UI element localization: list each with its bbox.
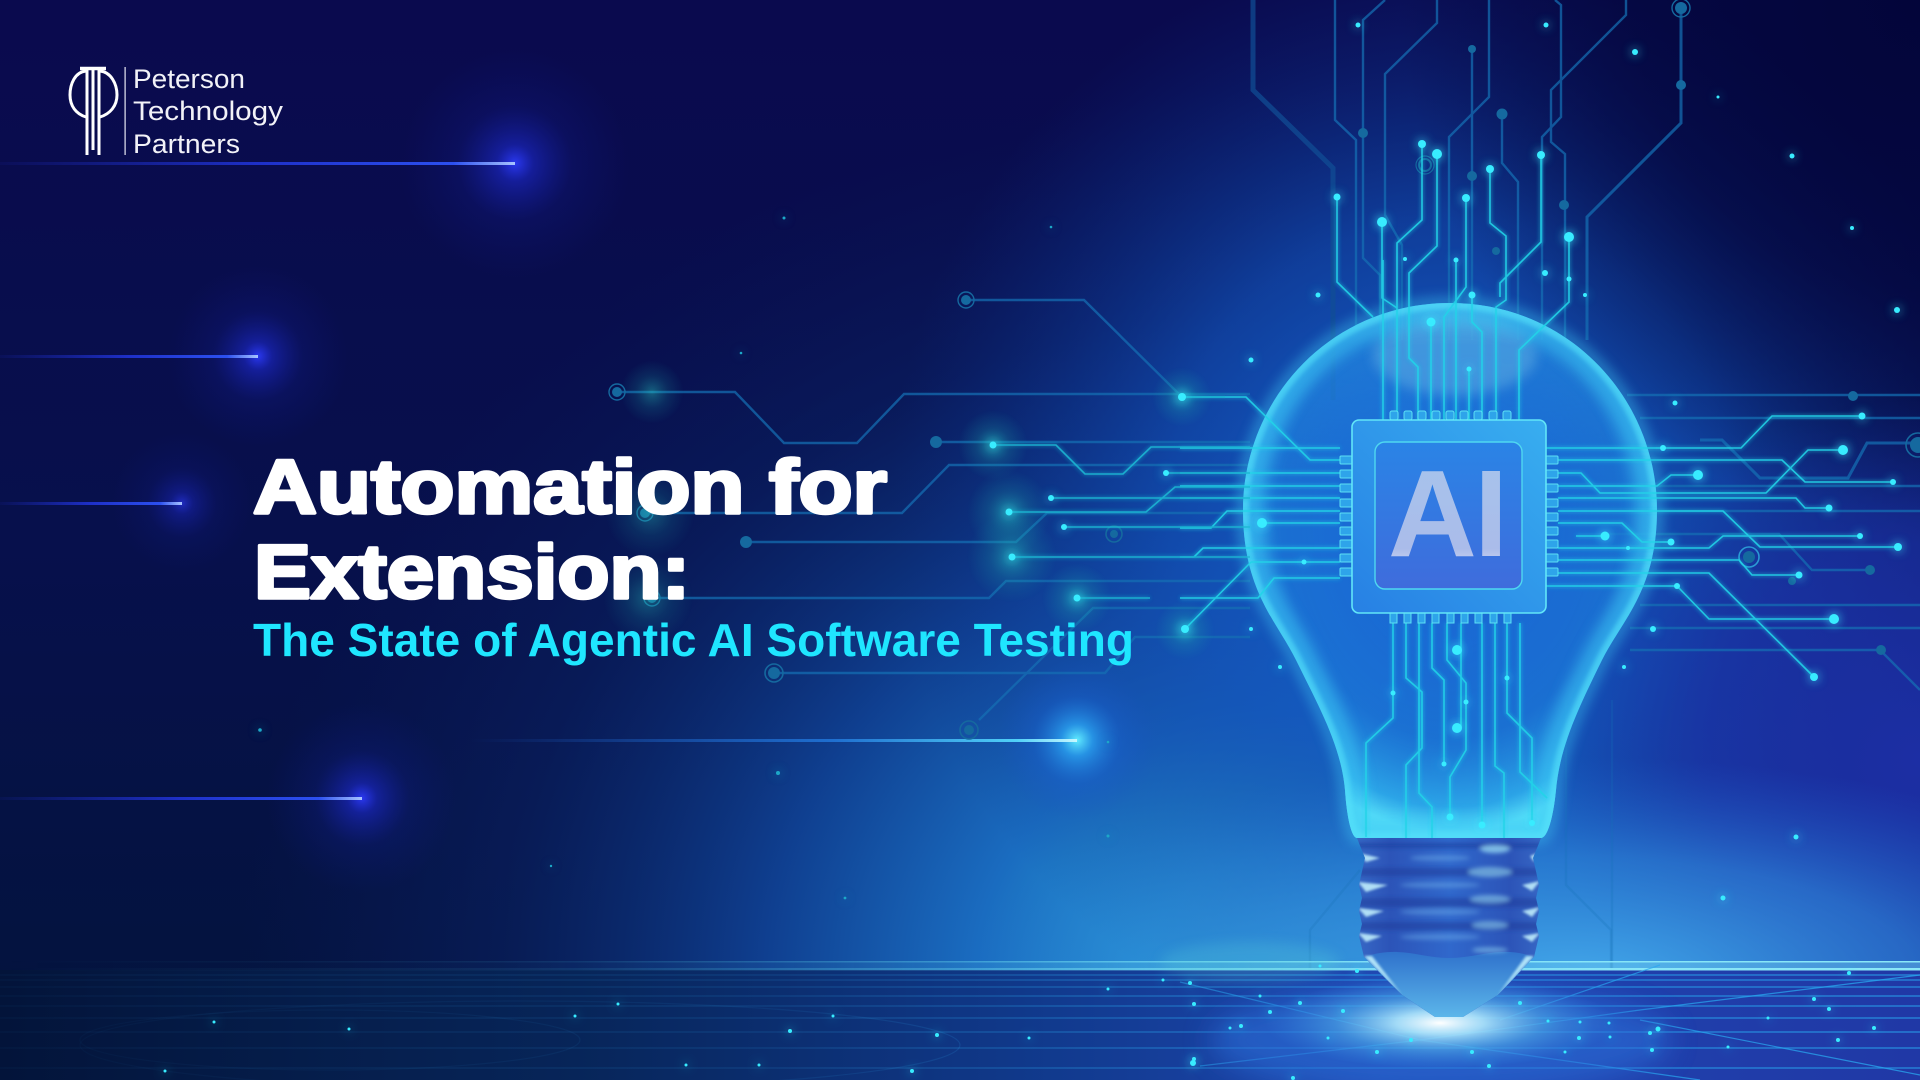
chip body xyxy=(1352,420,1546,613)
bulb outer glow xyxy=(1243,303,1657,838)
light streaks xyxy=(0,48,1157,893)
floor grid xyxy=(0,942,1920,1080)
logo icon xyxy=(70,68,117,155)
AI letters: I xyxy=(1474,446,1508,583)
chip pins xyxy=(1340,411,1558,623)
headline: Automation for xyxy=(253,445,887,530)
dim circuit nodes xyxy=(609,0,1920,739)
logo wordmark: Partners xyxy=(133,129,240,159)
AI chip xyxy=(1340,411,1558,623)
headline xyxy=(253,445,887,615)
logo wordmark: Peterson xyxy=(133,64,245,94)
AI letters: A xyxy=(1388,446,1477,583)
headline: Extension: xyxy=(254,530,690,615)
logo wordmark: Technology xyxy=(133,96,284,126)
bulb glass xyxy=(1230,300,1670,840)
chip inner panel xyxy=(1375,442,1522,589)
logo divider xyxy=(124,67,126,155)
bulb screw base xyxy=(1350,838,1550,1018)
logo xyxy=(70,64,284,159)
dim circuit traces xyxy=(617,0,1920,1050)
light bulb xyxy=(1230,300,1670,840)
subtitle: The State of Agentic AI Software Testing xyxy=(253,614,1134,666)
faint sky dots xyxy=(258,216,1110,899)
teal node glows xyxy=(603,360,1215,660)
bright circuit traces xyxy=(993,144,1898,838)
logo wordmark xyxy=(133,64,284,159)
